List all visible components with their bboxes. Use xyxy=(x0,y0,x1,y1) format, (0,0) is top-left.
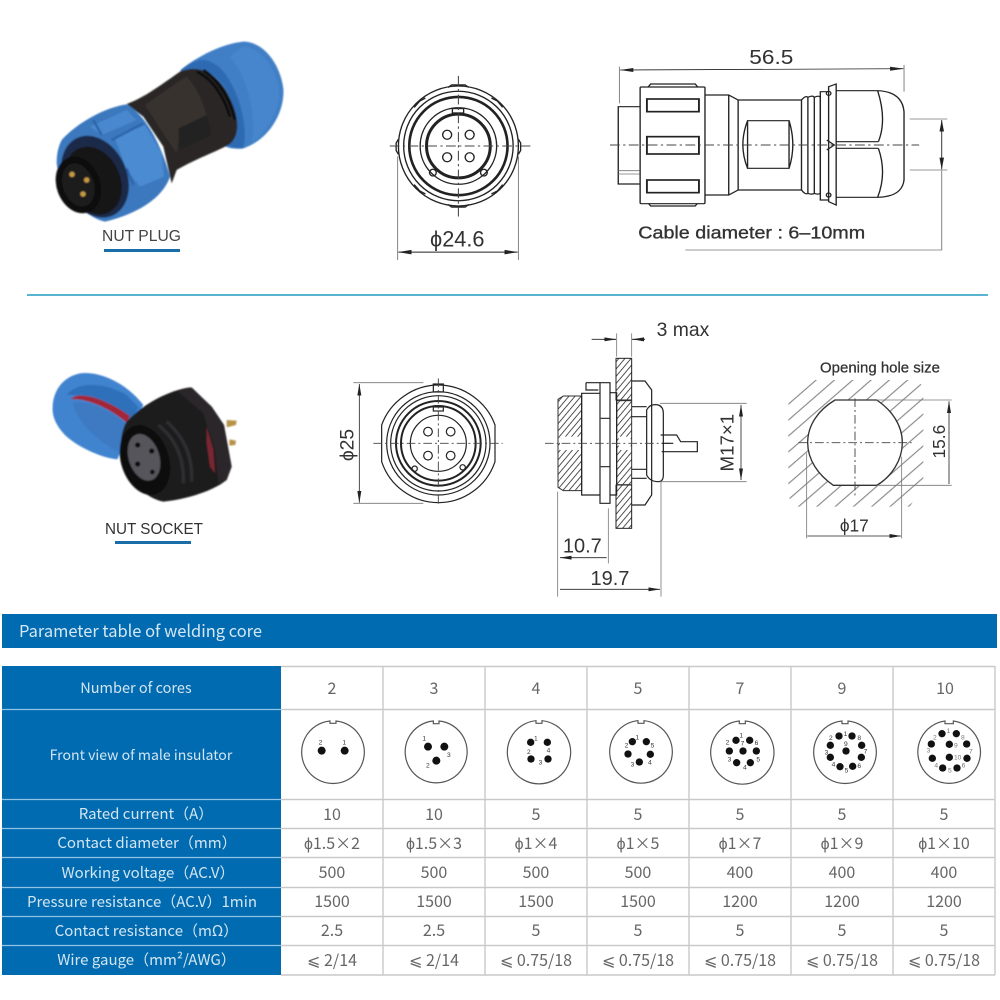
row: pressure resistance xyxy=(314,888,962,912)
row: working voltage: 400 xyxy=(727,859,753,883)
row: contact resistance: 5 xyxy=(532,917,541,941)
table grid xyxy=(281,666,995,975)
row: insulator pin diagrams 5-10: 3 xyxy=(825,749,829,756)
row: number of cores: 4 xyxy=(532,675,541,699)
table label column xyxy=(2,666,281,975)
row: insulator pin diagrams 5-10: 3 xyxy=(927,748,931,755)
row: insulator pin diagrams 5-10: 1 xyxy=(635,734,639,741)
row: insulator pin diagrams 5-10: 3 xyxy=(631,762,635,769)
drawing: plug side view with dimensions: Cable diameter : 6–10mm xyxy=(638,222,865,242)
row: wire gauge: ⩽ 0.75/18 xyxy=(806,947,878,971)
row: contact resistance xyxy=(321,917,949,941)
row: contact resistance: 5 xyxy=(634,917,643,941)
row: contact diameter: ϕ1×7 xyxy=(719,830,761,854)
row: working voltage xyxy=(319,859,957,883)
row: rated current: 10 xyxy=(323,801,341,825)
row: rated current: 5 xyxy=(838,801,847,825)
table label column: Contact diameter（mm） xyxy=(57,832,237,853)
row: number of cores: 9 xyxy=(838,675,847,699)
row: wire gauge: ⩽ 2/14 xyxy=(307,947,357,971)
row: insulator pin diagrams 2-5: 4 xyxy=(547,748,551,755)
row: contact resistance: 5 xyxy=(736,917,745,941)
drawing: plug front view xyxy=(390,76,530,260)
row: contact resistance: 5 xyxy=(838,917,847,941)
row: pressure resistance: 1200 xyxy=(926,888,962,912)
row: rated current: 5 xyxy=(736,801,745,825)
drawing: opening hole size: Opening hole size xyxy=(820,359,940,376)
row: insulator pin diagrams 5-10: 10 xyxy=(954,754,962,761)
table label column: Working voltage（AC.V） xyxy=(61,862,235,883)
row: working voltage: 500 xyxy=(421,859,447,883)
row: insulator pin diagrams 5-10: 7 xyxy=(969,748,973,755)
drawing: socket side view with dimensions: 3 max xyxy=(657,320,710,341)
row: contact diameter: ϕ1×9 xyxy=(821,830,863,854)
divider xyxy=(27,294,988,296)
row: number of cores: 5 xyxy=(634,675,643,699)
row: contact resistance: 2.5 xyxy=(321,917,343,941)
row: insulator pin diagrams 2-5: 2 xyxy=(319,740,323,747)
row: number of cores: 7 xyxy=(736,675,745,699)
table label column: Rated current（A） xyxy=(79,803,213,824)
row: contact diameter: ϕ1.5×3 xyxy=(406,830,462,854)
table label column: Contact resistance（mΩ） xyxy=(55,920,238,941)
table label column: Front view of male insulator xyxy=(50,745,233,765)
row: insulator pin diagrams 5-10: 2 xyxy=(625,742,629,749)
row: number of cores: 3 xyxy=(430,675,438,699)
row: insulator pin diagrams 2-5: 1 xyxy=(342,740,346,747)
table label column: Number of cores xyxy=(80,677,192,698)
row: wire gauge: ⩽ 2/14 xyxy=(409,947,459,971)
drawing: socket front view: ϕ25 xyxy=(337,429,358,461)
drawing: opening hole size: 15.6 xyxy=(929,425,949,459)
row: insulator pin diagrams 5-10: 4 xyxy=(743,765,747,772)
row: pressure resistance: 1500 xyxy=(314,888,350,912)
row: insulator pin diagrams 5-10: 6 xyxy=(857,763,861,770)
row: insulator pin diagrams 5-10: 4 xyxy=(934,762,938,769)
row: wire gauge: ⩽ 0.75/18 xyxy=(704,947,776,971)
row: rated current: 5 xyxy=(634,801,643,825)
row: number of cores: 10 xyxy=(936,675,954,699)
row: working voltage: 500 xyxy=(319,859,345,883)
table label column: Wire gauge（mm²/AWG） xyxy=(57,949,236,970)
row: insulator pin diagrams 5-10: 5 xyxy=(845,768,849,775)
row: insulator pin diagrams 5-10: 2 xyxy=(829,735,833,742)
row: insulator pin diagrams 2-5: 3 xyxy=(539,759,543,766)
row: number of cores xyxy=(328,675,954,699)
row: rated current xyxy=(323,801,949,825)
row: rated current: 5 xyxy=(940,801,949,825)
drawing: plug front view: ϕ24.6 xyxy=(430,227,485,252)
table label column: Pressure resistance（AC.V）1min xyxy=(27,891,257,912)
row: insulator pin diagrams 5-10: 2 xyxy=(933,734,937,741)
caption: nut plug: NUT PLUG xyxy=(102,228,181,245)
row: insulator pin diagrams 5-10: 9 xyxy=(844,741,848,748)
drawing: plug side view with dimensions: 56.5 xyxy=(749,46,793,69)
row: contact diameter: ϕ1×5 xyxy=(617,830,659,854)
row: wire gauge xyxy=(307,947,980,971)
row: contact diameter xyxy=(304,830,970,854)
row: working voltage: 500 xyxy=(523,859,549,883)
row: contact resistance: 5 xyxy=(940,917,949,941)
row: contact diameter: ϕ1×10 xyxy=(918,830,970,854)
caption: nut plug xyxy=(102,228,181,252)
row: working voltage: 400 xyxy=(829,859,855,883)
drawing: socket front view xyxy=(337,378,503,507)
row: insulator pin diagrams 5-10: 5 xyxy=(651,743,655,750)
row: insulator pin diagrams 5-10: 4 xyxy=(648,759,652,766)
row: insulator pin diagrams 2-5: 2 xyxy=(527,749,531,756)
row: insulator pin diagrams 5-10: 8 xyxy=(961,734,965,741)
row: contact resistance: 2.5 xyxy=(423,917,445,941)
row: contact diameter: ϕ1×4 xyxy=(515,830,557,854)
row: insulator pin diagrams 5-10: 1 xyxy=(844,731,848,738)
caption: nut socket: NUT SOCKET xyxy=(105,521,203,538)
row: insulator pin diagrams 5-10: 1 xyxy=(947,728,951,735)
row: insulator pin diagrams 5-10: 5 xyxy=(948,768,952,775)
drawing: socket side view with dimensions: 19.7 xyxy=(591,568,629,590)
row: rated current: 10 xyxy=(425,801,443,825)
row: insulator pin diagrams 5-10: 7 xyxy=(864,748,868,755)
row: insulator pin diagrams 5-10: 3 xyxy=(728,756,732,763)
drawing: socket pins and M17x1 dimension xyxy=(660,403,747,482)
row: insulator pin diagrams 5-10: 1 xyxy=(739,732,743,739)
row: insulator pin diagrams 2-5: 1 xyxy=(422,736,426,743)
drawing: socket pins and M17x1 dimension: M17×1 xyxy=(716,414,737,471)
row: number of cores: 2 xyxy=(328,675,337,699)
row: insulator pin diagrams 2-5: 3 xyxy=(447,752,451,759)
photo: nut plug connector xyxy=(48,42,283,229)
row: working voltage: 400 xyxy=(931,859,957,883)
row: insulator pin diagrams 5-10: 9 xyxy=(954,742,958,749)
drawing: opening hole size: ϕ17 xyxy=(840,516,869,536)
row: insulator pin diagrams 5-10: 6 xyxy=(755,740,759,747)
drawing: socket side view with dimensions xyxy=(545,320,710,597)
row: pressure resistance: 1500 xyxy=(620,888,656,912)
row: working voltage: 500 xyxy=(625,859,651,883)
drawing: plug side view with dimensions xyxy=(610,46,947,250)
row: insulator pin diagrams 2-5 xyxy=(302,721,571,784)
section heading bar xyxy=(2,614,997,648)
row: pressure resistance: 1200 xyxy=(722,888,758,912)
row: pressure resistance: 1500 xyxy=(416,888,452,912)
row: insulator pin diagrams 5-10: 2 xyxy=(726,739,730,746)
row: wire gauge: ⩽ 0.75/18 xyxy=(908,947,980,971)
drawing: socket side view with dimensions: 10.7 xyxy=(563,535,602,557)
row: wire gauge: ⩽ 0.75/18 xyxy=(602,947,674,971)
row: insulator pin diagrams 5-10: 8 xyxy=(857,735,861,742)
row: pressure resistance: 1200 xyxy=(824,888,860,912)
row: insulator pin diagrams 5-10: 6 xyxy=(962,762,966,769)
section heading bar: Parameter table of welding core xyxy=(19,618,262,642)
row: pressure resistance: 1500 xyxy=(518,888,554,912)
parameter table xyxy=(2,666,995,975)
row: wire gauge: ⩽ 0.75/18 xyxy=(500,947,572,971)
photo: nut socket connector xyxy=(53,373,237,502)
row: contact diameter: ϕ1.5×2 xyxy=(304,830,360,854)
row: insulator pin diagrams 2-5: 2 xyxy=(426,762,430,769)
drawing: opening hole size xyxy=(788,359,952,538)
row: insulator pin diagrams 5-10: 4 xyxy=(832,762,836,769)
row: rated current: 5 xyxy=(532,801,541,825)
row: insulator pin diagrams 5-10: 7 xyxy=(741,741,745,748)
row: insulator pin diagrams 5-10: 5 xyxy=(756,756,760,763)
row: insulator pin diagrams 2-5: 1 xyxy=(534,736,538,743)
row: insulator pin diagrams 5-10 xyxy=(610,721,980,784)
